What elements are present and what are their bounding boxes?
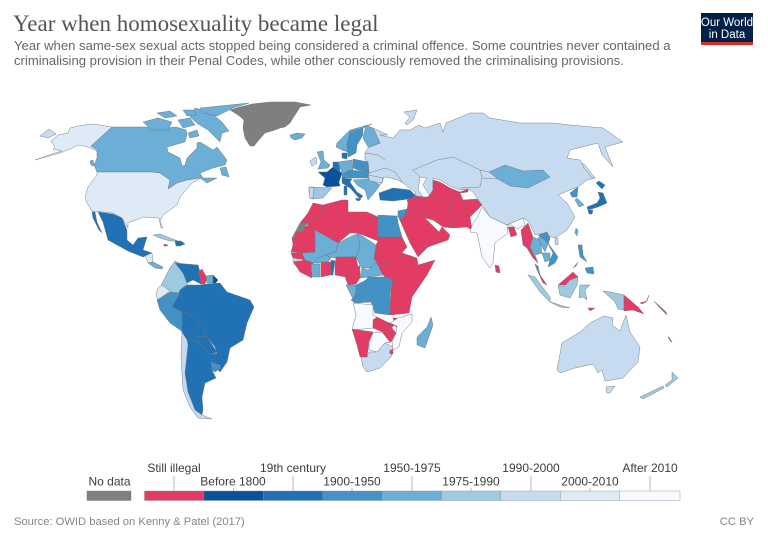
legend colour bar [144, 491, 680, 500]
legend tick marks [174, 476, 650, 491]
island: Alaska [40, 129, 56, 138]
legend labels: Still illegal [147, 461, 201, 475]
subtitle: criminalising provision in their Penal Codes, while other consciously removed the criminalising provisions. [14, 53, 624, 68]
legend [87, 461, 680, 500]
India and South Asia [470, 207, 525, 273]
world map [35, 102, 678, 419]
subtitle: Year when same-sex sexual acts stopped being considered a criminal offence. Some countries never contained a [14, 38, 671, 53]
Canada [90, 103, 249, 189]
legend labels: 2000-2010 [561, 474, 619, 488]
Mongolia [489, 165, 550, 188]
licence: CC BY [720, 516, 755, 528]
Caribbean [153, 234, 185, 246]
USA [85, 172, 201, 228]
Europe [309, 124, 383, 201]
New Zealand [665, 372, 678, 387]
Iceland [290, 133, 305, 140]
source: Source: OWID based on Kenny & Patel (2017) [14, 516, 245, 528]
legend labels: After 2010 [622, 461, 678, 475]
legend labels [147, 461, 678, 488]
legend: no data [87, 474, 131, 500]
legend labels: 1975-1990 [442, 474, 500, 488]
Middle East [379, 180, 482, 257]
Tasmania [606, 386, 615, 393]
Greenland [230, 102, 311, 146]
East Asia: Koreas, Japan, Mongolia [489, 165, 607, 214]
legend labels: 1950-1975 [383, 461, 441, 475]
logo: Our World in Data: Our World [701, 17, 753, 29]
Oceania [557, 315, 678, 399]
Southeast Asia [521, 223, 667, 315]
South America [156, 261, 254, 419]
Alaska [35, 124, 112, 160]
legend: no data: No data [88, 474, 131, 488]
Russia, Central Asia, China [365, 110, 623, 245]
Africa [291, 200, 435, 372]
legend labels: 19th century [260, 461, 326, 475]
logo: Our World in Data [701, 13, 753, 45]
Mexico and Central America [92, 212, 163, 269]
legend labels: 1900-1950 [323, 474, 381, 488]
legend labels: 1990-2000 [502, 461, 560, 475]
title: Year when homosexuality became legal [13, 11, 379, 36]
subtitle [14, 38, 671, 68]
logo: Our World in Data: in Data [709, 29, 746, 41]
Australia [557, 315, 640, 381]
legend labels: Before 1800 [200, 474, 266, 488]
